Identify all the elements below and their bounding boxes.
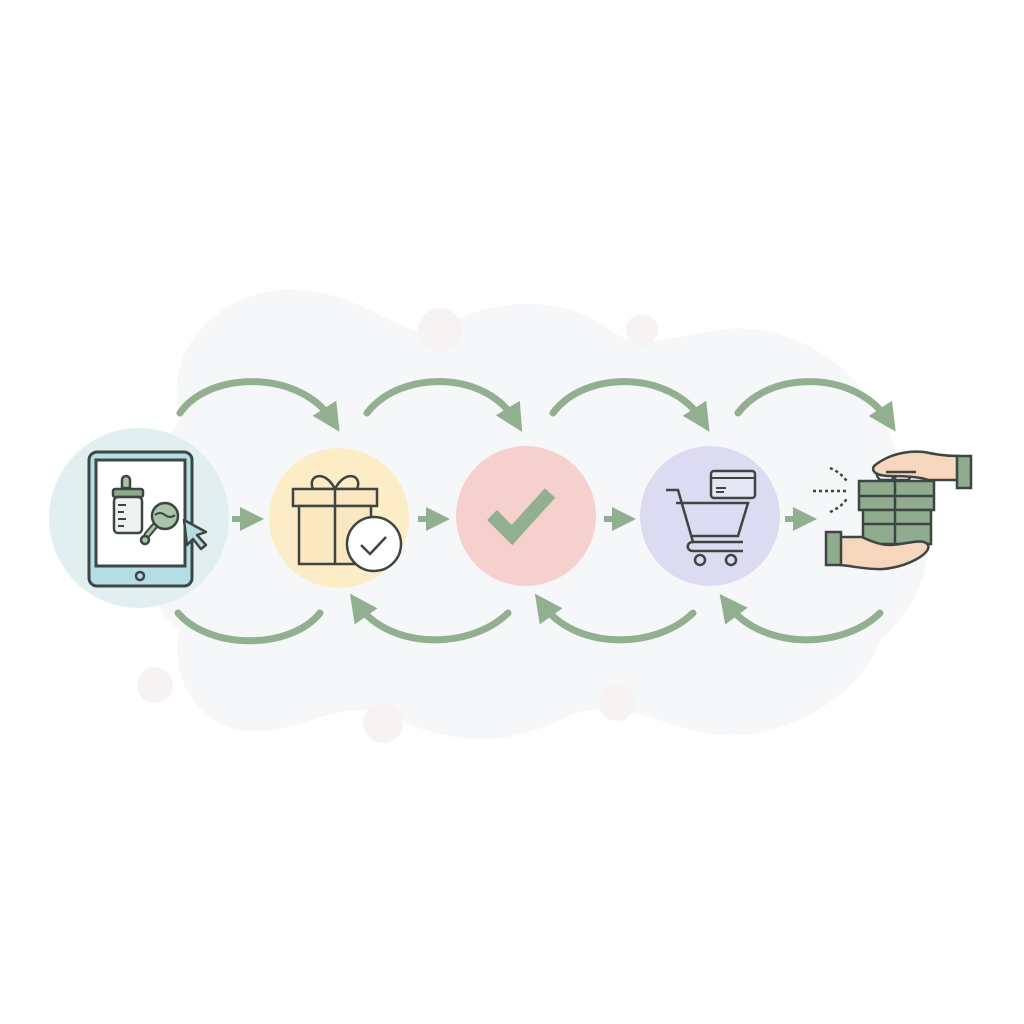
bottom arcs (178, 605, 880, 641)
small arrows (232, 516, 805, 522)
top arcs (180, 382, 888, 420)
step 4: cart and card (640, 446, 780, 586)
step 5: hands giving gift (813, 452, 971, 569)
background blob (137, 290, 929, 743)
step 2: gift with check (269, 448, 409, 588)
step 1: tablet (49, 428, 229, 608)
step 3: checkmark (456, 446, 596, 586)
